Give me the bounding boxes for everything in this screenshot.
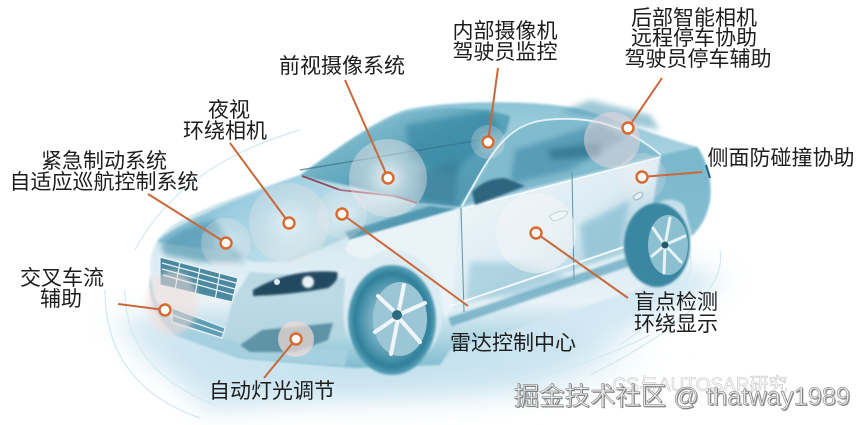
label: auto lighting: 自动灯光调节 <box>209 380 335 403</box>
label: side collision: 侧面防碰撞协助 <box>708 147 854 170</box>
label: night vision: 夜视 <box>208 99 250 122</box>
label: night vision <box>183 99 267 143</box>
fog lamp <box>240 323 333 352</box>
label: cross traffic: 交叉车流 <box>20 267 104 290</box>
label: interior camera: 内部摄像机 <box>452 20 558 43</box>
door panels <box>450 157 661 308</box>
label: emergency braking <box>10 150 198 194</box>
label: rear smart camera: 后部智能相机 <box>631 7 757 30</box>
label: blind spot: 盲点检测 <box>634 291 718 314</box>
front grille <box>160 257 238 338</box>
floor glow under car <box>100 250 730 415</box>
leader lines <box>118 68 702 378</box>
side windows <box>462 119 661 206</box>
marker rings <box>160 122 648 344</box>
dashboard line <box>302 176 417 203</box>
watermark: 掘金技术社区 @ thatway1989 <box>514 383 850 411</box>
label: emergency braking: 自适应巡航控制系统 <box>10 171 198 194</box>
bumper shading <box>225 272 345 345</box>
sensor zones <box>146 112 666 357</box>
label: rear smart camera: 驾驶员停车辅助 <box>624 48 772 71</box>
label: interior camera <box>452 20 558 64</box>
label: rear smart camera: 远程停车协助 <box>631 27 757 50</box>
faint channel watermark: CS与AUTOSAR研究 <box>613 374 787 396</box>
label: front camera: 前视摄像系统 <box>279 55 405 78</box>
sound-wave arcs <box>105 130 721 418</box>
car body <box>150 102 710 368</box>
watermark: 掘金技术社区 @ thatway1989 <box>515 384 851 412</box>
front wheel arch <box>343 250 443 370</box>
rear quarter <box>652 147 710 236</box>
label: blind spot: 环绕显示 <box>634 313 718 336</box>
front wheel <box>348 265 436 375</box>
door handles <box>549 192 643 221</box>
label: interior camera: 驾驶员监控 <box>452 41 558 64</box>
hood <box>157 176 460 262</box>
rear wheel <box>624 203 690 287</box>
car <box>150 100 710 375</box>
label: cross traffic <box>20 267 104 311</box>
windshield <box>300 108 510 207</box>
label: cross traffic: 辅助 <box>40 288 82 311</box>
mirror <box>472 178 525 205</box>
label: radar control: 雷达控制中心 <box>450 332 576 355</box>
label: blind spot <box>634 291 718 336</box>
label: emergency braking: 紧急制动系统 <box>41 150 167 173</box>
headlight <box>253 271 338 296</box>
label: night vision: 环绕相机 <box>183 120 267 143</box>
label: rear smart camera <box>624 7 772 71</box>
